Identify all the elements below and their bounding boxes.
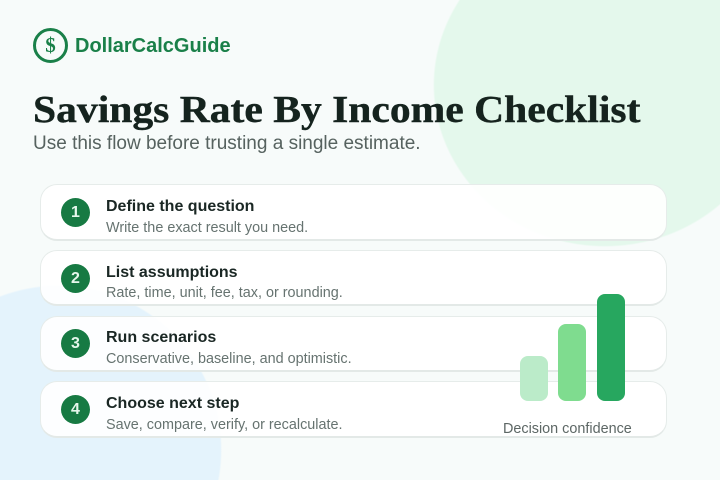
- step number 4: [61, 395, 90, 424]
- step 3 description: Conservative, baseline, and optimistic.: [106, 351, 352, 367]
- low bar: [520, 356, 548, 401]
- step number 3: 3: [71, 335, 80, 352]
- subtitle: Use this flow before trusting a single estimate.: [33, 133, 421, 154]
- icon: dollar coin: $: [45, 33, 56, 57]
- step number 4: 4: [71, 401, 80, 418]
- step number 2: [61, 264, 90, 293]
- step 2 description: Rate, time, unit, fee, tax, or rounding.: [106, 285, 343, 301]
- title: Savings Rate By Income Checklist: [33, 89, 640, 131]
- step 2 heading: List assumptions: [106, 264, 238, 281]
- brand name: DollarCalcGuide: [75, 35, 231, 57]
- high bar: [597, 294, 625, 401]
- step 1 card: [40, 184, 667, 241]
- step number 3: [61, 329, 90, 358]
- step number 1: 1: [71, 204, 80, 221]
- step 1 heading: Define the question: [106, 198, 254, 215]
- step 3 card: [40, 316, 667, 372]
- step 4 card: [40, 381, 667, 438]
- logo: [33, 28, 231, 63]
- background blob: green: [433, 0, 720, 248]
- background blob: blue: [0, 285, 223, 480]
- medium bar: [558, 324, 586, 401]
- step 1 description: Write the exact result you need.: [106, 220, 308, 236]
- step 4 heading: Choose next step: [106, 395, 239, 412]
- step 3 heading: Run scenarios: [106, 329, 216, 346]
- chart label: Decision confidence: [503, 421, 632, 437]
- step number 1: [61, 198, 90, 227]
- step 2 card: [40, 250, 667, 306]
- step 4 description: Save, compare, verify, or recalculate.: [106, 417, 342, 433]
- step number 2: 2: [71, 270, 80, 287]
- icon: dollar coin: [33, 28, 68, 63]
- bar chart: decision confidence: [503, 294, 632, 437]
